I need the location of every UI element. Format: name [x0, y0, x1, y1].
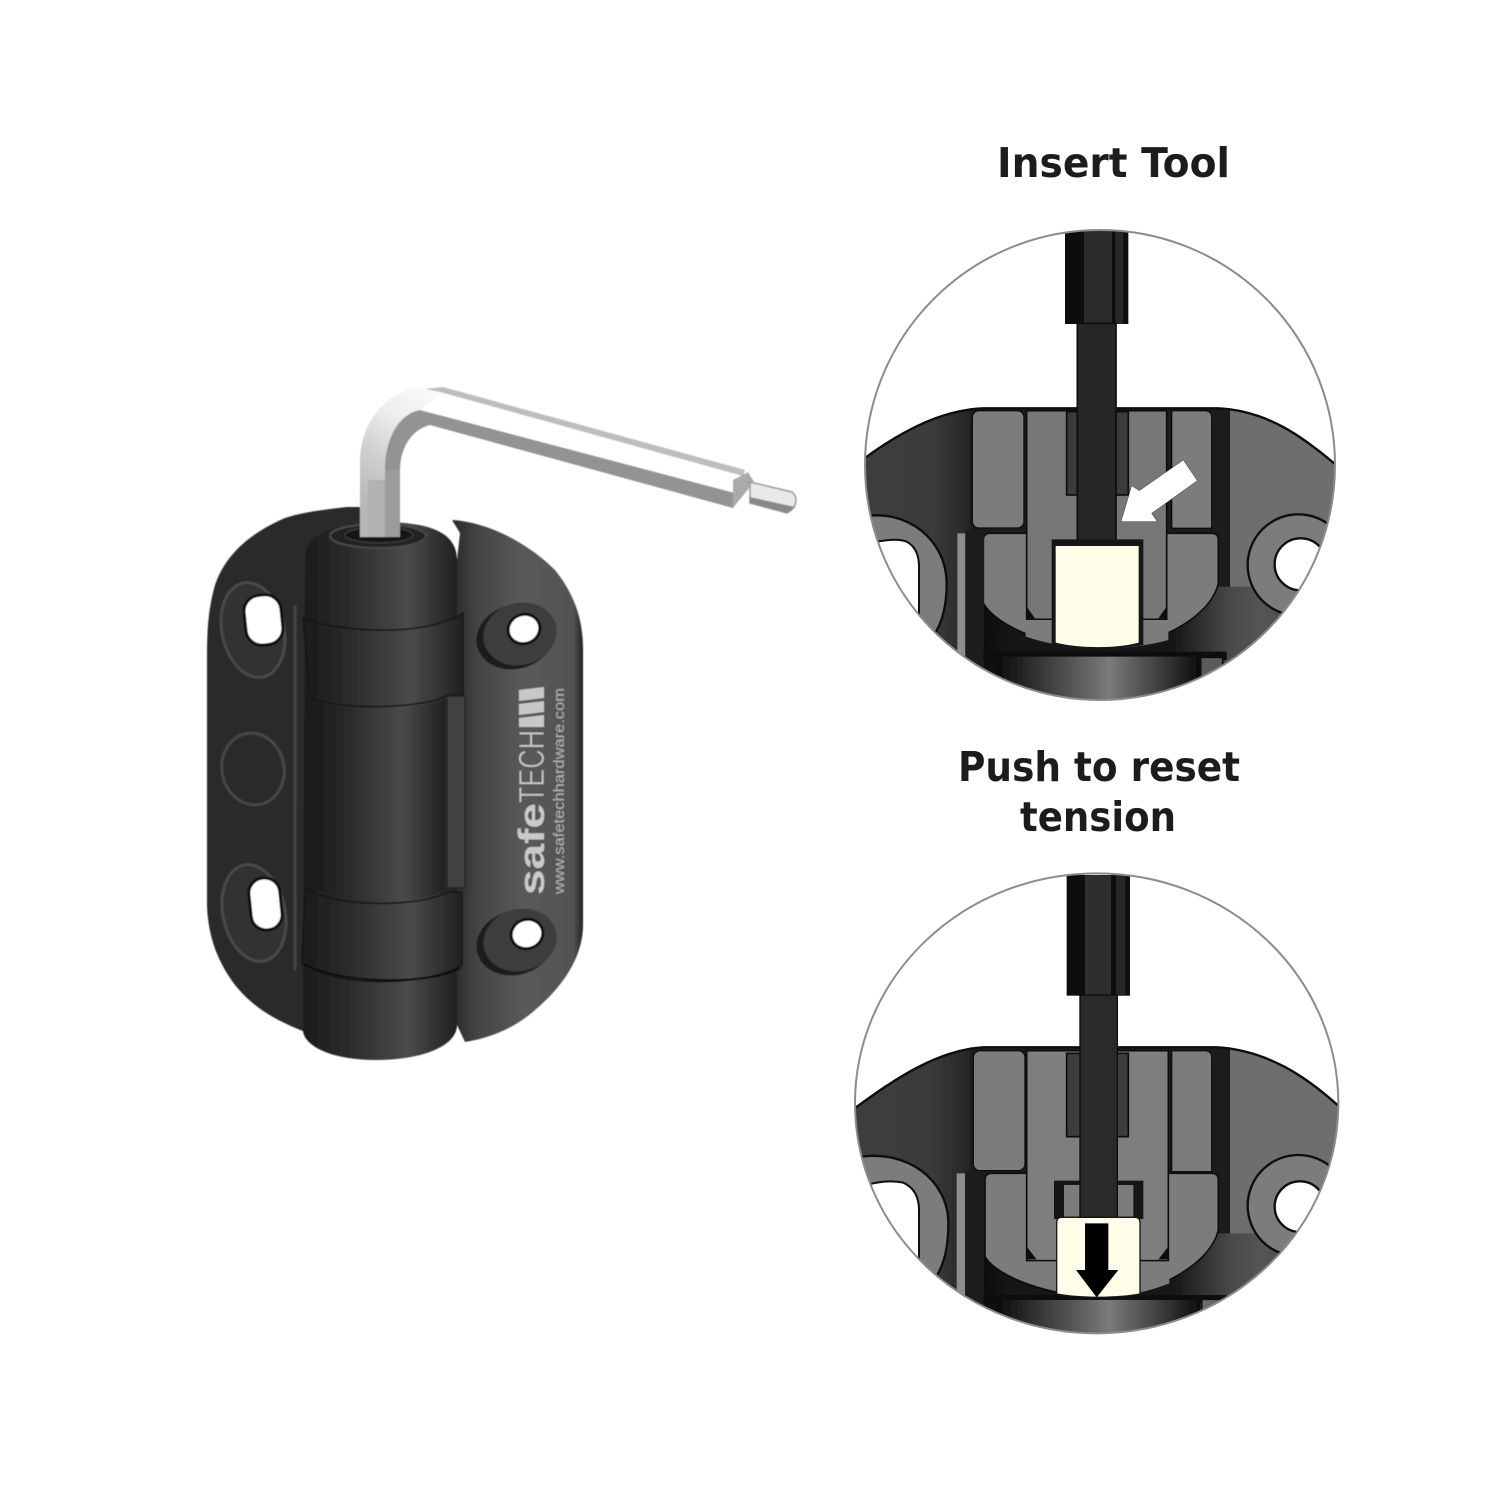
panel: push to reset detail circle: [853, 873, 1350, 1370]
housing top outline: [860, 408, 1340, 468]
logo wordmark: TECH: [511, 730, 552, 803]
left plate rim line: [294, 605, 296, 970]
lower bowl block: [985, 1173, 1218, 1297]
hinge right plate: [452, 520, 583, 1042]
detail drawing: [856, 875, 1338, 1332]
heading: Push to reset tension: Push to reset: [958, 743, 1240, 791]
right mount ring: [1246, 513, 1327, 614]
hinge left plate: [207, 507, 380, 1040]
block upper right: [1172, 1051, 1212, 1172]
detail drawing: [860, 230, 1350, 720]
slot hole upper left: [213, 577, 293, 683]
dark strip right: [1212, 1054, 1213, 1167]
right hole: [1275, 1181, 1325, 1232]
housing right: [1217, 1047, 1340, 1370]
logo stripes: [519, 687, 544, 727]
logo wordmark: [511, 730, 552, 895]
hex tool head: [1067, 875, 1130, 996]
piece bottom notches: [1027, 607, 1167, 618]
barrel top ring inner: [345, 527, 413, 543]
cream plug: [1052, 539, 1143, 649]
dark strip right: [1212, 410, 1228, 525]
circular indentation: [215, 727, 291, 811]
hex tool head: [1065, 230, 1128, 324]
small block right: [1201, 657, 1223, 677]
cream plug: [1057, 1217, 1140, 1297]
barrel lower knuckle: [302, 887, 462, 982]
centre sliding piece: [1027, 1051, 1168, 1261]
housing right: [1217, 408, 1340, 720]
centre sliding piece: [1027, 411, 1167, 619]
ellipse outline: [855, 873, 1338, 1333]
housing top outline: [853, 1047, 1340, 1109]
barrel: [303, 522, 457, 1060]
block upper right: [1172, 411, 1212, 528]
left vertical strips: [957, 1173, 965, 1347]
logo wordmark: safe: [511, 803, 552, 895]
left slot: [878, 538, 920, 614]
screw boss upper right: [469, 594, 564, 678]
housing centre: [970, 1047, 1230, 1234]
white arrow: [1121, 460, 1197, 522]
barrel bottom edge line: [302, 963, 460, 980]
right hole: [1275, 538, 1327, 590]
plug socket inner: [1064, 1185, 1133, 1217]
left vertical strips: [957, 533, 966, 656]
piece bottom notches: [1027, 1247, 1168, 1259]
left slot: [857, 1181, 919, 1263]
hex key: [360, 387, 796, 537]
housing centre: [970, 408, 1230, 587]
housing dark left: [866, 410, 970, 656]
tool shaft: [1077, 323, 1116, 542]
heading: Insert Tool: Insert Tool: [997, 139, 1230, 187]
barrel centre section: [312, 699, 445, 901]
left mount ring: [857, 1156, 948, 1285]
lower bowl block: [983, 533, 1218, 648]
black down arrow: [1076, 1223, 1118, 1297]
right mount ring: [1248, 1155, 1349, 1256]
circle outline: [865, 230, 1335, 700]
barrel side slot: [447, 696, 465, 888]
infographic canvas: [206, 146, 1340, 1334]
slot hole lower left: [213, 859, 295, 967]
heading: Push to reset tension: [958, 743, 1240, 841]
inner dark channel: [1067, 412, 1128, 495]
screw boss lower right: [469, 900, 564, 984]
cylinder: [984, 652, 1227, 675]
block upper left: [972, 411, 1024, 528]
product image: hinge with hex key: [207, 387, 796, 1060]
heading: Push to reset tension: tension: [1020, 793, 1176, 841]
barrel top ring: [330, 524, 426, 548]
plug socket: [1054, 1181, 1143, 1219]
logo url: www.safetechhardware.com: [551, 688, 568, 895]
inner dark channel: [1067, 1053, 1128, 1137]
panel: insert tool detail circle: [860, 230, 1350, 720]
left mount ring: [863, 515, 947, 633]
piece bottom bowl fill: [1026, 620, 1168, 648]
housing dark left: [856, 1050, 970, 1290]
cylinder: [983, 1295, 1227, 1370]
piece bottom bowl fill: [1026, 1261, 1169, 1297]
dark band below bowl: [984, 586, 1280, 674]
barrel upper knuckle: [303, 613, 463, 707]
block upper left: [973, 1051, 1025, 1171]
small block right: [1202, 1299, 1224, 1329]
dark band below bowl: [984, 1233, 1278, 1312]
tool shaft: [1080, 995, 1117, 1218]
